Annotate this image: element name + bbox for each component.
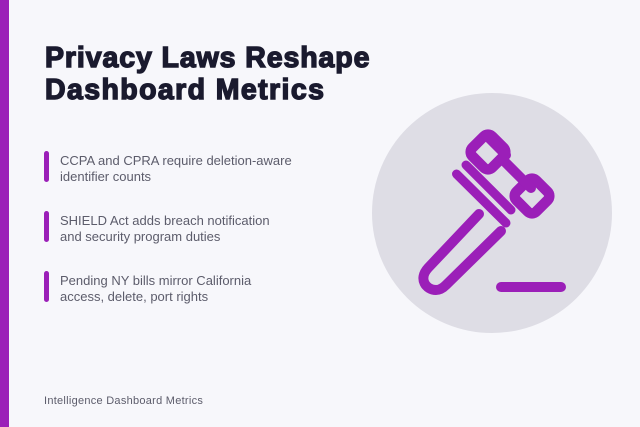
bullet 2 — [44, 211, 270, 244]
left accent bar — [0, 0, 9, 427]
title: Privacy Laws Reshape — [45, 42, 370, 74]
gavel connector — [486, 135, 531, 188]
gavel handle — [423, 214, 501, 290]
footer text: Intelligence Dashboard Metrics — [44, 395, 203, 407]
bullet 1: CCPA and CPRA require deletion-aware — [60, 153, 292, 168]
gavel base line — [501, 282, 561, 292]
icon: gavel in circle — [372, 93, 612, 333]
bullet 1 — [44, 151, 292, 184]
title — [45, 42, 370, 106]
gavel head left — [468, 132, 508, 172]
bullet 2: and security program duties — [60, 229, 220, 244]
gavel — [423, 132, 561, 290]
bullet 3: access, delete, port rights — [60, 289, 208, 304]
bullet 1: identifier counts — [60, 169, 151, 184]
icon background circle — [372, 93, 612, 333]
bullet 3: Pending NY bills mirror California — [60, 273, 251, 288]
bullet 2: SHIELD Act adds breach notification — [60, 213, 270, 228]
title: Dashboard Metrics — [45, 74, 325, 106]
bullet 3 — [44, 271, 252, 304]
gavel head right — [512, 176, 552, 216]
gavel bands — [456, 165, 511, 223]
